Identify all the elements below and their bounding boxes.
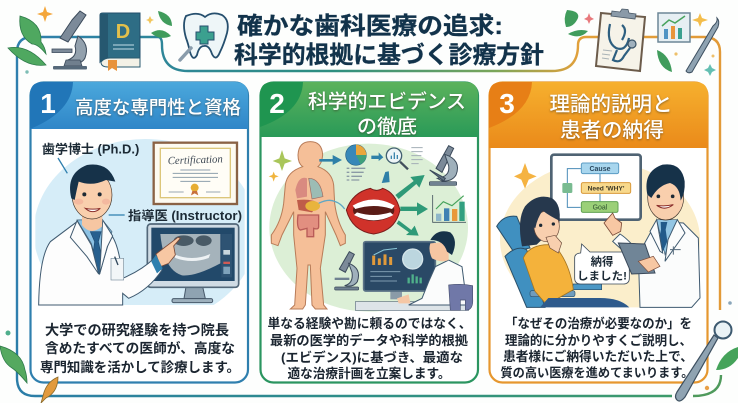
panel 3 body text: 患者様にご納得いただいた上で、 bbox=[503, 349, 693, 364]
icon: tooth logo bbox=[180, 13, 228, 60]
panel 3 illustration bbox=[497, 155, 700, 318]
panel 2 body text bbox=[268, 316, 472, 381]
panel 1 body text: 含めたすべての医師が、高度な bbox=[45, 340, 235, 356]
light blue backdrop bbox=[35, 139, 245, 305]
panel 3 body text: 「なぜその治療が必要なのか」を bbox=[505, 316, 692, 331]
magnifier with report bbox=[386, 148, 423, 169]
panel 1 header: 1 bbox=[40, 88, 56, 119]
panel 3 header: 3 bbox=[499, 88, 515, 119]
icon: bottom left leaves bbox=[0, 330, 58, 403]
flowchart board: Need 'WHY' bbox=[588, 185, 625, 192]
certificate bbox=[154, 143, 237, 204]
flowchart board: Goal bbox=[593, 205, 608, 212]
panel 2 body text: (エビデンス)に基づき、最適な bbox=[281, 350, 463, 365]
label: PhD with leader bbox=[42, 141, 139, 173]
panel 1 header bbox=[30, 82, 248, 129]
panel 1 body text: 大学での研究経験を持つ院長 bbox=[45, 322, 229, 339]
panel 1: expertise bbox=[30, 82, 257, 382]
panel 2 illustration bbox=[269, 142, 473, 312]
panel 2 header bbox=[260, 82, 478, 138]
speech bubble: しました! bbox=[577, 270, 627, 283]
flowchart board: Cause bbox=[590, 166, 611, 173]
certificate: Certification bbox=[168, 153, 223, 167]
patient in dental chair bbox=[497, 197, 629, 307]
cream backdrop bbox=[500, 168, 700, 308]
header icons right bbox=[565, 9, 719, 76]
icon: book: D bbox=[116, 21, 130, 43]
flowchart board bbox=[551, 155, 641, 220]
panel 2 header: の徹底 bbox=[357, 116, 417, 138]
panel 3 body text: 質の高い医療を進めてまいります。 bbox=[500, 365, 694, 380]
light green backdrop bbox=[269, 144, 468, 312]
panel 2: evidence bbox=[260, 82, 478, 382]
speech bubble bbox=[575, 244, 629, 284]
human body with organs bbox=[271, 142, 345, 309]
icon: bottom right leaf and dots bbox=[705, 301, 738, 390]
doctor with tablet bbox=[604, 164, 700, 307]
panel 2 body text: 適な治療計画を立案します。 bbox=[288, 366, 450, 381]
sparkle bbox=[514, 163, 537, 189]
panel 2 header: 2 bbox=[269, 88, 285, 119]
icon: clipboard with stethoscope bbox=[596, 9, 645, 71]
label: PhD with leader: 歯学博士 (Ph.D.) bbox=[42, 141, 139, 156]
panel 3: explanation bbox=[489, 82, 708, 382]
bar chart bbox=[433, 195, 466, 222]
researcher at monitor bbox=[355, 231, 473, 310]
title: 確かな歯科医療の追求: bbox=[237, 13, 503, 40]
panel 2 body text: 単なる経験や勘に頼るのではなく、 bbox=[268, 316, 472, 331]
panel 3 header: 患者の納得 bbox=[560, 119, 664, 142]
microscope large bbox=[429, 146, 458, 185]
icon: leaves left bbox=[8, 6, 172, 74]
mouth bbox=[346, 188, 400, 234]
panel 2 body text: 最新の医学的データや科学的根拠 bbox=[270, 333, 468, 348]
monitor with x-ray bbox=[147, 224, 239, 303]
panel 1 illustration bbox=[35, 139, 245, 306]
panel 3 header: 理論的説明と bbox=[550, 93, 672, 116]
icon: microscope bbox=[52, 11, 87, 70]
panel 1 body text: 専門知識を活かして診療します。 bbox=[40, 359, 240, 375]
title: 科学的根拠に基づく診療方針 bbox=[234, 42, 544, 69]
icon: growth chart card bbox=[658, 13, 690, 42]
icon: book bbox=[100, 13, 140, 71]
icon: dental tweezers bbox=[686, 18, 719, 73]
doctor bbox=[39, 165, 180, 305]
microscope small bbox=[335, 252, 359, 290]
panel 1 body text bbox=[40, 322, 240, 375]
flow arrows bbox=[319, 152, 428, 236]
label: Instructor with leader: 指導医 (Instructor) bbox=[128, 208, 242, 223]
icon: dental mirror bbox=[676, 322, 732, 401]
pie chart bbox=[346, 145, 366, 180]
panel 1 header: 高度な専門性と資格 bbox=[75, 97, 241, 118]
panel 2 header: 科学的エビデンス bbox=[308, 90, 466, 113]
panel 3 body text: 理論的に分かりやすくご説明し、 bbox=[505, 333, 692, 348]
sparkles bbox=[269, 150, 292, 182]
panel 3 header bbox=[489, 82, 708, 148]
header icons left bbox=[8, 6, 228, 74]
icon: right leaves and sparkles bbox=[565, 10, 716, 76]
bottom decorations bbox=[0, 301, 738, 403]
panel 3 body text bbox=[500, 316, 694, 380]
speech bubble: 納得 bbox=[591, 254, 613, 268]
title bbox=[234, 13, 544, 69]
